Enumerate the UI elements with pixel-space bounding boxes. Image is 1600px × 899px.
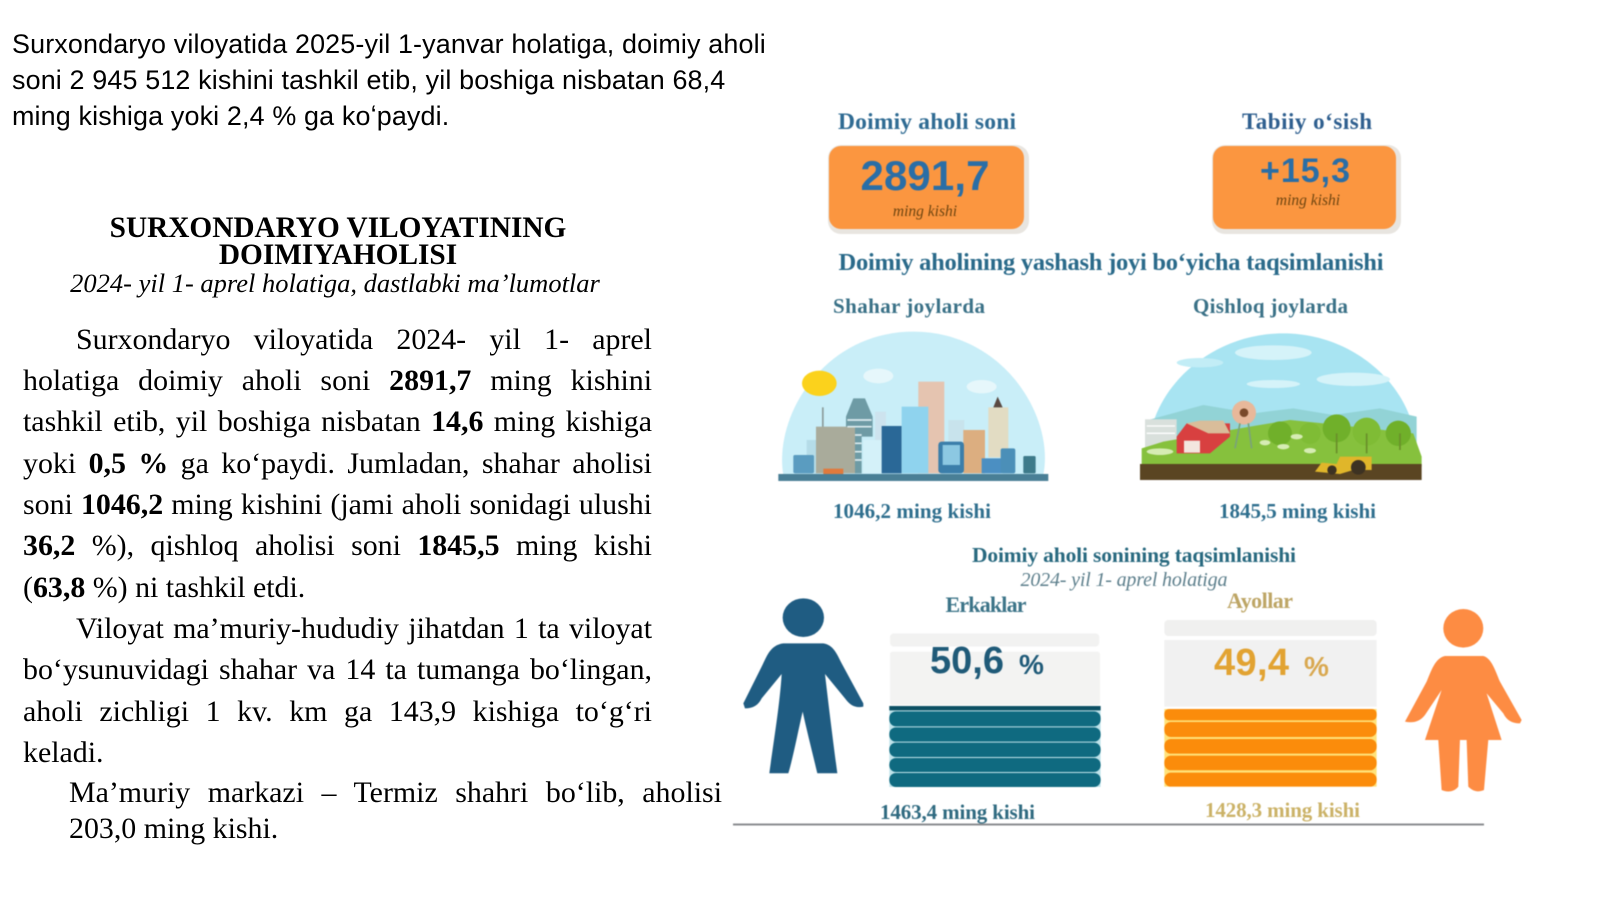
subheading: date: 2024- yil 1- aprel holatiga — [1020, 569, 1228, 591]
icon: female figure — [1405, 609, 1522, 791]
text block: administrative centre: Ma’muriy markazi – Termiz shahri boʻlib, aholisi — [69, 776, 722, 809]
text block: population paragraph: yoki 0,5 % ga koʻpaydi. Jumladan, shahar aholisi — [23, 447, 652, 480]
text block: administrative paragraph: boʻysunuvidagi shahar va 14 ta tumanga boʻlingan, — [23, 653, 652, 686]
card: natural growth: +15,3 — [1260, 152, 1350, 190]
card: population total: 2891,7 — [860, 152, 990, 199]
value: women percent: % — [1304, 651, 1329, 682]
value: men percent — [930, 640, 1044, 682]
illustration: rural farm — [1140, 333, 1422, 480]
illustration: city skyline — [778, 332, 1048, 481]
label: women: Ayollar — [1227, 588, 1293, 613]
card: natural growth: ming kishi — [1276, 192, 1340, 209]
text block: population paragraph: tashkil etib, yil boshiga nisbatan 14,6 ming kishiga — [23, 405, 652, 438]
heading: population distribution: Doimiy aholi sonining taqsimlanishi — [972, 543, 1296, 567]
label: rural: Qishloq joylarda — [1193, 294, 1348, 318]
value: women percent — [1214, 642, 1329, 684]
intro paragraph: ming kishiga yoki 2,4 % ga koʻpaydi. — [12, 101, 449, 131]
icon: male figure — [743, 598, 863, 773]
card: natural growth — [1212, 145, 1401, 234]
heading: region population: DOIMIYAHOLISI — [219, 239, 457, 271]
heading: region population — [110, 212, 566, 271]
label: men: Erkaklar — [946, 592, 1027, 617]
text block: administrative paragraph — [23, 612, 652, 769]
baseline rule — [733, 824, 1484, 826]
text block: administrative paragraph: aholi zichligi 1 kv. km ga 143,9 kishiga toʻgʻri — [23, 695, 652, 728]
text block: population paragraph: 36,2 %), qishloq aholisi soni 1845,5 ming kishi — [23, 529, 652, 562]
value: urban population: 1046,2 ming kishi — [833, 499, 991, 523]
value: rural population: 1845,5 ming kishi — [1219, 499, 1376, 523]
heading: permanent population: Doimiy aholi soni — [838, 109, 1016, 135]
card: population total: ming kishi — [893, 203, 957, 220]
card: population total — [828, 145, 1029, 234]
text block: population paragraph: holatiga doimiy aholi soni 2891,7 ming kishini — [23, 364, 652, 397]
value: men population: 1463,4 ming kishi — [880, 800, 1035, 824]
label: urban: Shahar joylarda — [833, 294, 986, 318]
text block: administrative centre: 203,0 ming kishi. — [69, 812, 278, 845]
bar: women share — [1164, 620, 1377, 787]
text block: administrative centre — [69, 776, 722, 845]
heading: region population: SURXONDARYO VILOYATINING — [110, 212, 566, 244]
bar: men share — [889, 633, 1101, 787]
text block: population paragraph: Surxondaryo viloyatida 2024- yil 1- aprel — [76, 323, 652, 356]
value: women population: 1428,3 ming kishi — [1205, 798, 1360, 822]
text block: population paragraph — [23, 323, 652, 604]
value: women percent: 49,4 — [1214, 642, 1289, 684]
text block: population paragraph: soni 1046,2 ming kishini (jami aholi sonidagi ulushi — [23, 488, 652, 521]
value: men percent: 50,6 — [930, 640, 1004, 682]
value: men percent: % — [1019, 649, 1044, 680]
heading: distribution by residence: Doimiy aholining yashash joyi boʻyicha taqsimlanishi — [838, 249, 1384, 276]
text block: administrative paragraph: keladi. — [23, 736, 104, 769]
intro paragraph: Surxondaryo viloyatida 2025-yil 1-yanvar holatiga, doimiy aholi — [12, 29, 766, 59]
intro paragraph: soni 2 945 512 kishini tashkil etib, yil boshiga nisbatan 68,4 — [12, 65, 725, 95]
intro paragraph — [12, 29, 766, 131]
text block: population paragraph: (63,8 %) ni tashkil etdi. — [23, 571, 305, 604]
text block: administrative paragraph: Viloyat ma’muriy-hududiy jihatdan 1 ta viloyat — [76, 612, 652, 645]
heading: natural growth: Tabiiy oʻsish — [1242, 109, 1372, 134]
subheading: date note: 2024- yil 1- aprel holatiga, dastlabki ma’lumotlar — [70, 268, 600, 298]
